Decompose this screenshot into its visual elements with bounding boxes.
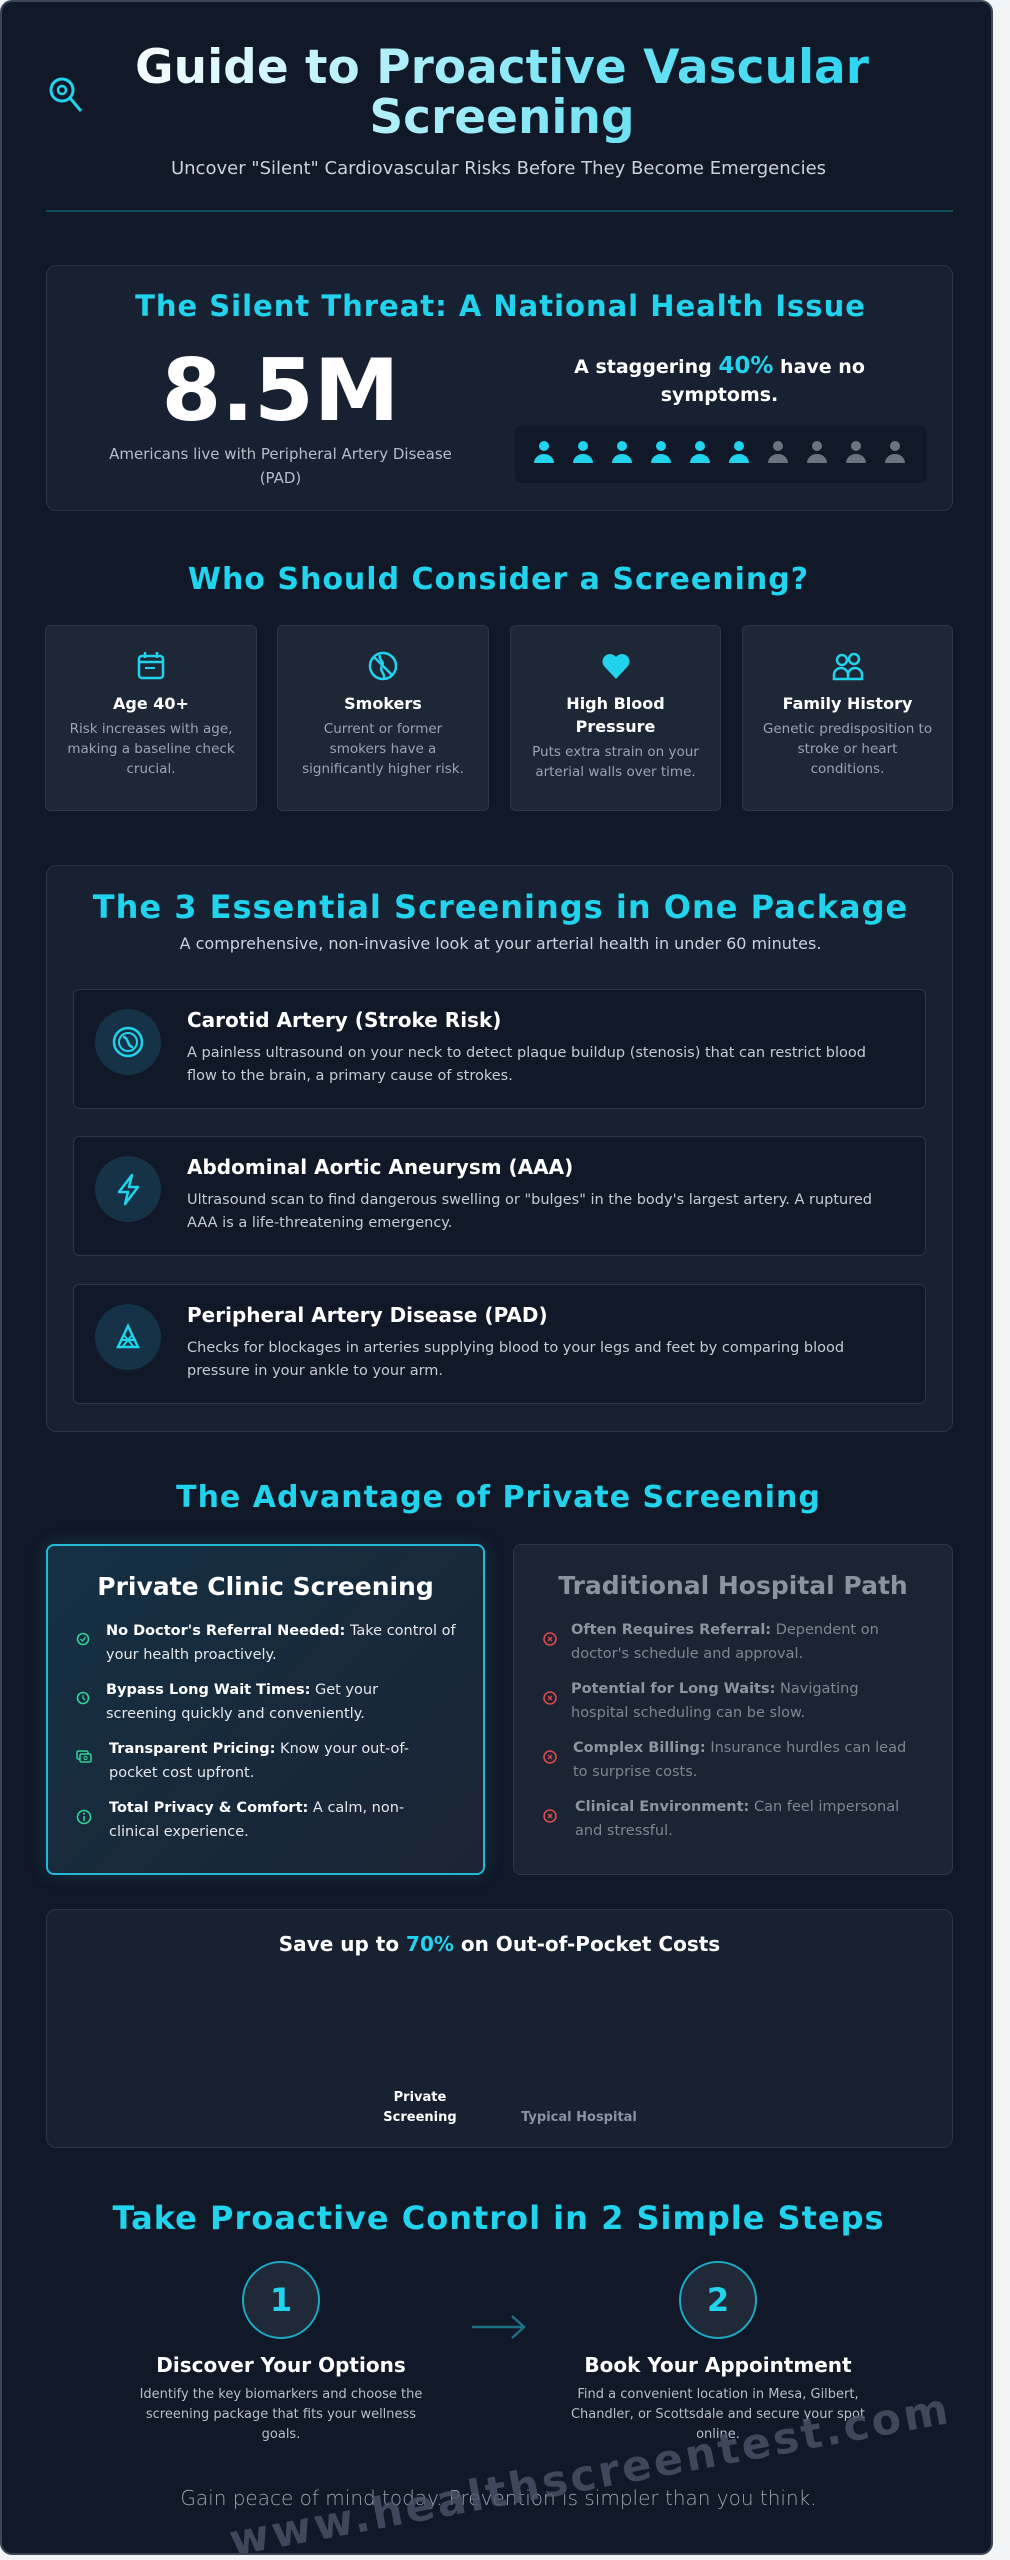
stat: 8.5M: 8.5M: [162, 341, 399, 441]
list: private benefits: Transparent Pricing: Know your out-of-pocket cost upfront.: [109, 1741, 409, 1781]
card: family history: Genetic predisposition to stroke or heart conditions.: [763, 721, 932, 777]
list: hospital drawbacks: Clinical Environment: Can feel impersonal and stressful.: [575, 1799, 899, 1839]
item: PAD: Peripheral Artery Disease (PAD): [187, 1303, 548, 1327]
item: carotid: Carotid Artery (Stroke Risk): [187, 1008, 501, 1032]
list: hospital drawbacks: Complex Billing: Insurance hurdles can lead to surprise costs.: [573, 1740, 906, 1780]
step 2: Find a convenient location in Mesa, Gilbert, Chandler, or Scottsdale and secure your spot online.: [571, 2387, 865, 2442]
step 1: [140, 2261, 422, 2442]
item: AAA: Ultrasound scan to find dangerous swelling or "bulges" in the body's largest artery. A ruptured AAA is a life-threatening emergency.: [187, 1192, 872, 1231]
heading: who should consider: Who Should Consider a Screening?: [188, 562, 809, 597]
item: carotid: [73, 989, 926, 1109]
subtitle: screenings: A comprehensive, non-invasive look at your arterial health in under 60 minutes.: [180, 934, 821, 953]
subtitle: Uncover "Silent" Cardiovascular Risks Before They Become Emergencies: [171, 158, 826, 179]
card: family history: Family History: [783, 694, 912, 713]
panel: private clinic: [46, 1544, 485, 1875]
stat: 40% no symptoms: A staggering 40% have no: [574, 353, 865, 379]
panel: 3 essential screenings: [46, 865, 953, 1432]
icon: PAD: [95, 1304, 161, 1370]
stat: 40% no symptoms: [574, 353, 865, 406]
heading: two steps: Take Proactive Control in 2 Simple Steps: [112, 2199, 885, 2237]
panel: silent threat: [46, 265, 953, 511]
card: high blood pressure: [510, 625, 721, 811]
chart label: private: Screening: [383, 2110, 457, 2125]
panel: savings chart: [46, 1909, 953, 2148]
list: private benefits: [76, 1623, 456, 1840]
step 2: [571, 2261, 865, 2442]
item: PAD: [73, 1284, 926, 1404]
list: private benefits: Total Privacy & Comfort: A calm, non-clinical experience.: [109, 1800, 404, 1840]
chart title: Save up to 70% on Out-of-Pocket Costs: [279, 1932, 720, 1956]
panel: traditional hospital: Traditional Hospital Path: [558, 1571, 908, 1600]
card: age 40+: [45, 625, 257, 811]
title: Screening: [369, 90, 635, 145]
icon: magnifier: [50, 78, 82, 112]
stat: 8.5M: (PAD): [260, 469, 301, 487]
list: hospital drawbacks: Often Requires Referral: Dependent on doctor's schedule and approval.: [571, 1622, 879, 1662]
stat: 40% no symptoms: symptoms.: [661, 384, 778, 406]
card: high blood pressure: Puts extra strain on your arterial walls over time.: [532, 744, 699, 780]
title: Guide to Proactive Vascular: [135, 40, 869, 95]
card: high blood pressure: Pressure: [576, 717, 655, 736]
step 1: 1: [270, 2281, 292, 2319]
item: carotid: A painless ultrasound on your neck to detect plaque buildup (stenosis) that can restrict blood flow to the brain, a primary cause of strokes.: [187, 1045, 866, 1084]
stat: 8.5M: [109, 341, 452, 487]
list: private benefits: Bypass Long Wait Times: Get your screening quickly and conveniently.: [106, 1682, 378, 1722]
card: smokers: [277, 625, 489, 811]
card: age 40+: Risk increases with age, making a baseline check crucial.: [67, 721, 235, 777]
card: family history: [742, 625, 953, 811]
item: AAA: Abdominal Aortic Aneurysm (AAA): [187, 1155, 573, 1179]
step 1: Identify the key biomarkers and choose the screening package that fits your wellness goals.: [140, 2387, 422, 2442]
card: age 40+: Age 40+: [113, 694, 189, 713]
list: private benefits: No Doctor's Referral Needed: Take control of your health proactively.: [106, 1623, 456, 1663]
chart label: hospital: Typical Hospital: [521, 2110, 637, 2125]
icon: carotid: [95, 1009, 161, 1075]
step 2: Book Your Appointment: [584, 2353, 852, 2377]
chart label: private: [383, 2090, 457, 2125]
card: high blood pressure: High Blood: [566, 694, 665, 713]
heading: silent threat: The Silent Threat: A National Health Issue: [135, 289, 866, 323]
heading: advantage: The Advantage of Private Screening: [176, 1480, 821, 1515]
icon: AAA: [95, 1156, 161, 1222]
chart label: private: Private: [394, 2090, 446, 2105]
step 2: 2: [707, 2281, 729, 2319]
arrow: [472, 2315, 526, 2339]
item: PAD: Checks for blockages in arteries supplying blood to your legs and feet by comparing blood pressure in your ankle to your arm.: [187, 1340, 844, 1379]
panel: traditional hospital: [513, 1544, 953, 1875]
stat: 8.5M: Americans live with Peripheral Artery Disease: [109, 445, 452, 463]
heading: 3 essential screenings: The 3 Essential Screenings in One Package: [93, 888, 908, 926]
list: hospital drawbacks: [543, 1622, 906, 1839]
card: smokers: Smokers: [344, 694, 422, 713]
footer tagline: Gain peace of mind today. Prevention is simpler than you think.: [180, 2486, 817, 2510]
step 1: Discover Your Options: [156, 2353, 406, 2377]
list: hospital drawbacks: Potential for Long Waits: Navigating hospital scheduling can be slow.: [571, 1681, 859, 1721]
panel: private clinic: Private Clinic Screening: [97, 1572, 434, 1601]
title: [102, 43, 902, 143]
icon row: people: [515, 426, 927, 483]
card: smokers: Current or former smokers have a significantly higher risk.: [302, 721, 464, 777]
item: AAA: [73, 1136, 926, 1256]
